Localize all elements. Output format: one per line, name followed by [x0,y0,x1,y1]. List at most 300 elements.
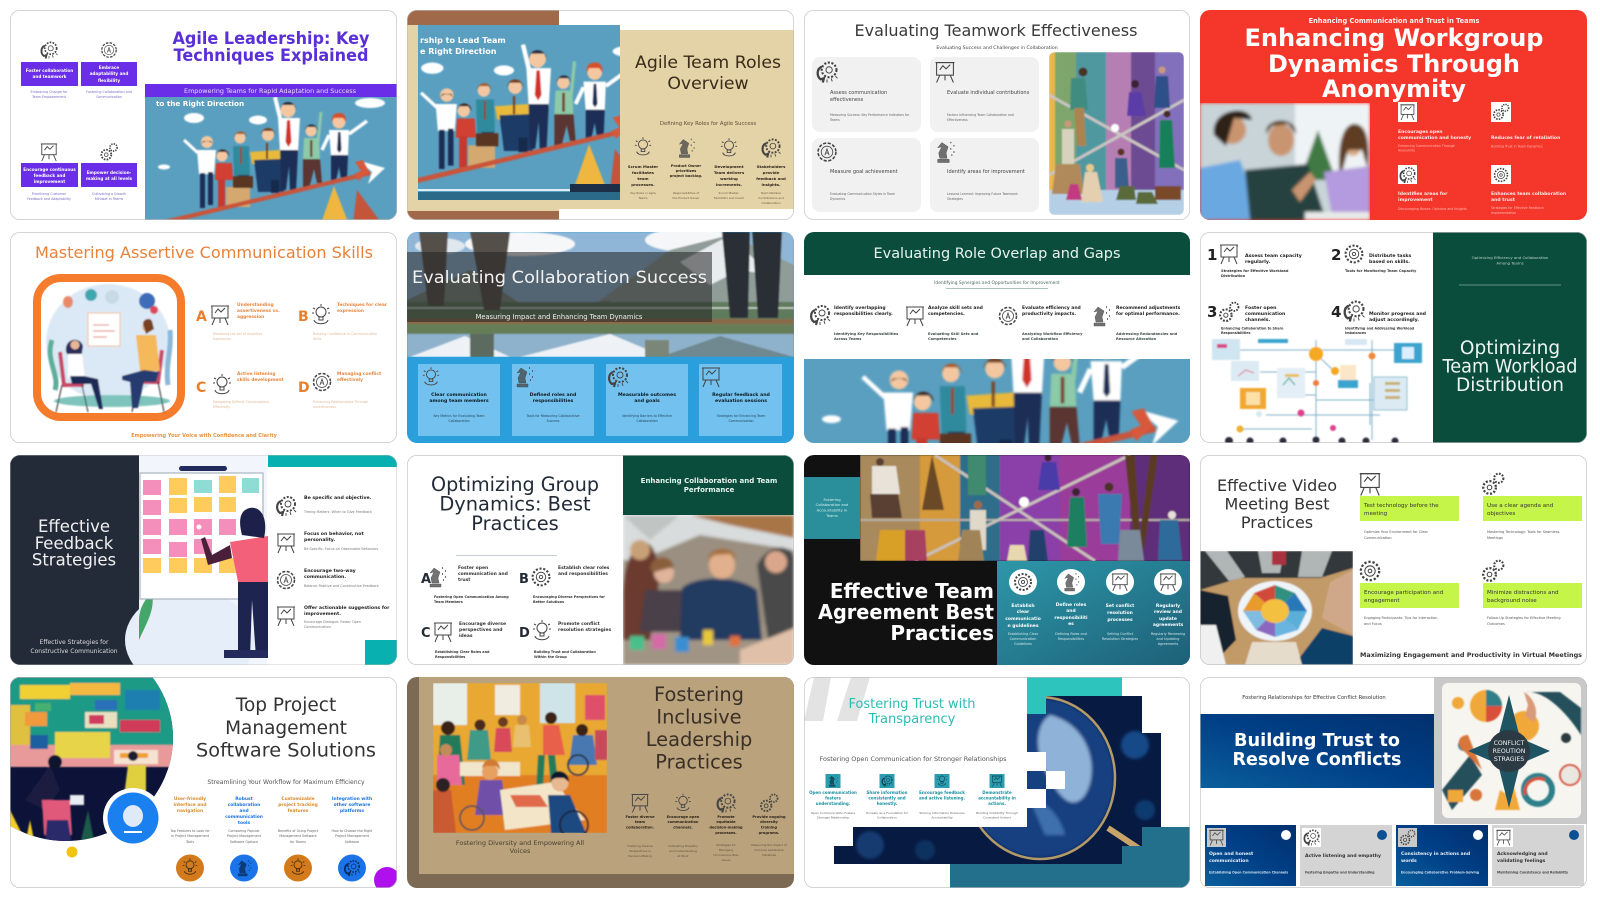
practice C: ideas [459,633,473,639]
technique: collaboration: Team Empowerment [31,95,67,99]
teal panel [997,561,1190,665]
illustration: team on arrow: e Right Direction [420,47,497,56]
item: overlapping responsibilities [811,305,898,341]
metric: clear communication: Key Metrics for Evaluating Team [433,414,485,418]
column: collaboration: Comparing Popular [228,829,260,833]
step 4: 4 [1331,303,1341,321]
title: Fostering Trust: Fostering Trust with [848,697,976,712]
tip: agenda: Use a clear agenda and [1487,503,1554,509]
role: Product Owner: prioritizes [676,169,696,173]
practice: open communication: at Work [677,854,689,858]
practice: roles: and [1066,608,1076,614]
step 1: regularly. [1245,259,1270,265]
tip: test technology [1360,474,1459,540]
column: tracking: Benefits of Using Project [278,829,319,833]
photo: builders and ropes [860,454,1190,561]
practice A: Fostering Open Communication Among [434,595,509,599]
benefit: fear of retaliation: Reduces fear of retaliation [1491,135,1560,141]
benefit: open communication: Anonymity [1398,148,1415,152]
practice D: Within the Group [534,655,567,659]
step: share information: Honesty as a Foundation for [866,811,909,815]
tip: behavior: Focus on behavior, not [304,531,364,537]
practice B: B [519,572,529,587]
item D: Managing conflict [337,371,381,377]
step 3 [1207,303,1285,335]
step: share information: Share information [867,790,908,795]
accent: teal top block [1027,677,1122,714]
step 1: Distribution [1221,274,1246,278]
tip: agenda: objectives [1487,511,1516,517]
panel: Enhancing Workgroup Dynamics slide [1200,10,1587,220]
practice: diverse collaboration [625,794,655,858]
card: individual contributions: Factors Influencing Team Collaboration and [947,113,1014,117]
step 3: channels. [1245,317,1271,323]
subtitle: Fostering Diversity and Empowering All [456,839,584,847]
tip: be specific: Timing Matters: When to Give Feedback [303,510,372,514]
role: Stakeholders: Team Member [760,191,782,195]
illustration: conflict resolution compass: REOUTION [1493,748,1526,755]
metric: clear communication: Collaboration [448,419,470,423]
sidebar with title: Strategies [32,550,116,570]
practice B: Better Solutions [533,600,564,604]
column: collaboration: and [239,808,249,814]
sidebar with title [10,455,139,665]
card: open communication: Open and honest [1209,851,1254,857]
tip: participation [1360,562,1459,626]
step 4: Imbalances [1345,331,1366,335]
step 4: Monitor progress and [1369,311,1426,317]
step: encourage feedback: Accountability [931,816,953,820]
practice C: Encourage diverse [459,621,506,627]
kicker: Enhancing Communication and Trust in Teams [1309,17,1479,25]
benefit: open communication: Encourages open [1398,129,1442,135]
item D [298,371,381,409]
practice: communication guidelines: communicatio [1005,616,1041,622]
practice: open communication: Cultivating Empathy [668,844,698,848]
card: goal achievement [812,138,921,212]
illustration: inclusive classroom [433,683,607,839]
title: Agile Team Roles: Agile Team Roles [635,53,781,73]
item B: Techniques for clear [337,302,388,308]
card: individual contributions: Evaluate individual contributions [947,90,1030,96]
metric: defined roles [512,364,594,436]
technique: feedback: improvement [34,179,65,184]
practice: open communication: channels. [673,826,693,830]
metric: defined roles: Success [547,419,560,423]
tip: agenda: Meetings [1487,536,1503,540]
subtitle band [145,84,397,97]
panel: Agile Leadership slide [10,10,397,232]
practice: equitable decisions: processes. [715,831,737,835]
step 4 [1331,302,1426,335]
practice B: Encouraging Diverse Perspectives for [533,595,605,599]
step 2: Distribute tasks [1369,253,1412,259]
item C: Effectively [213,405,230,409]
tagline: Maximizing Engagement and Productivity in Virtual Meetings [1360,652,1582,659]
benefit: areas for improvement: Discouraging Biases: Opinions and Insights [1398,207,1467,211]
item C: Active listening [237,371,276,377]
sidebar with title: Effective Strategies for [40,639,109,646]
diagram: connected workflow [1212,339,1422,445]
benefit: open communication: communication and honesty [1398,135,1471,141]
step: encourage feedback [919,774,966,820]
practice A: A [421,572,431,587]
column: collaboration: tools [238,820,251,826]
column: integration: other software [334,802,370,808]
role: Development Team: increments. [716,182,743,187]
tip: participation: Encourage participation and [1364,590,1444,596]
practice: conflict resolution: processes [1107,617,1133,623]
practice: diversity training [751,794,788,857]
metric: measurable outcomes: Measurable outcomes [618,392,676,398]
practice A: trust [458,577,471,583]
step: accountability: Demonstrate [982,790,1012,795]
accent: top bar [268,455,397,467]
header band with title: Evaluating Role Overlap and Gaps [874,246,1120,262]
column: collaboration: Software Options [230,840,258,844]
title band [1200,714,1434,788]
title overlay [407,252,712,322]
column: interface: User-friendly [174,796,206,802]
practice C: C [421,626,431,641]
item: skill sets [906,305,983,341]
role: Development Team [714,138,745,200]
title: Optimizing Group Dynamics: Dynamics: Best [439,492,591,516]
tip: agenda: Mastering Technology: Tools for Seamless [1487,530,1560,534]
metric: measurable outcomes: Identifying Barriers to Effective [622,414,672,418]
item: adjustments: for optimal performance. [1116,311,1180,317]
column: tracking: Management Software [279,834,317,838]
column: interface: navigation [177,808,203,814]
role: Scrum Master: team [637,176,649,181]
metric: defined roles: responsibilities [533,398,573,404]
metric: defined roles: Defined roles and [530,392,576,398]
illustration: team on arrow: to the Right Direction [156,99,244,108]
title: Fostering Inclusive Leadership: Inclusive [656,706,742,728]
photo: circle of people around wheel [1200,551,1353,665]
item: overlapping responsibilities: responsibilities clearly. [834,311,893,317]
subtitle: Voices [510,847,531,855]
item C: skills development [237,377,284,383]
technique: adaptability: Embrace [99,65,119,70]
practice: review agreements: Regularly Reviewing [1151,632,1185,636]
item: efficiency: and Collaboration [1022,337,1058,341]
role: Development Team: working [720,176,738,181]
tip: participation: and Focus [1364,622,1382,626]
practice: equitable decisions: decision-making [709,826,743,830]
sidebar with title: Feedback [35,534,114,553]
practice: communication guidelines: clear [1017,609,1030,615]
item D: D [298,380,310,396]
role: Scrum Master [628,137,658,200]
tip: minimize distractions: background noise [1487,598,1537,604]
metric: clear communication: Clear communication [431,392,487,398]
card: goal achievement: Measure goal achievement [830,169,898,175]
tip: participation: engagement [1364,598,1400,604]
benefit: fear of retaliation: Building Trust in Team Dynamics [1491,144,1543,148]
photo: team on ropes [1049,52,1184,215]
item C [196,371,284,409]
step 1: Strategies for Effective Workload [1221,269,1289,273]
technique: feedback: Feedback and Adaptability [27,197,71,201]
step 1 [1207,245,1302,278]
role: Stakeholders: Collaboration [761,201,781,205]
card: acknowledging feelings: Acknowledging and [1497,851,1548,857]
illustration: team close-up [804,309,1190,521]
accent: dark teal bottom block [950,827,1190,888]
step 3: Foster open [1245,305,1276,311]
card: open communication [1205,825,1296,886]
column: interface: interface and [173,802,207,808]
tip: be specific: Be specific and objective. [304,495,372,501]
panel: Effective Video Meeting slide [1200,455,1587,665]
side band [1433,232,1587,443]
step: accountability: actions. [988,801,1006,806]
tagline: Empowering Your Voice with Confidence and Clarity [131,433,278,439]
practice: diverse collaboration: Decision-Making [628,854,652,858]
card: acknowledging feelings: validating feelings [1497,858,1545,864]
practice: diverse collaboration: Fostering Diverse [627,844,653,848]
item: overlapping responsibilities: Identify overlapping [834,305,886,311]
item A [196,302,280,341]
practice: open communication: and Understanding [669,849,697,853]
step: share information: consistently and [868,796,906,800]
title: Effective Team Agreement: Practices [890,621,994,645]
practice: diverse collaboration: team [635,820,645,824]
technique: decision making: Cultivating a Growth [92,192,126,196]
practice C: perspectives and [459,627,502,633]
subtitle: Evaluating Success and Challenges in Collaboration [936,45,1058,51]
card: open communication: communication [1209,858,1249,864]
card: goal achievement: Evaluating Communication Styles in Team [830,192,895,196]
illustration: conflict resolution compass: STRAGIES [1494,756,1524,763]
practice: diversity training: programs. [759,831,779,835]
panel: Team Workload Distribution slide [1200,232,1587,445]
role: Stakeholders: Stakeholders [757,164,786,169]
practice: communication guidelines: Establishing Clear [1008,632,1039,636]
practice A: communication and [458,571,508,577]
technique: adaptability: Fostering Collaboration and [86,90,132,94]
title: Enhancing Workgroup Dynamics: Enhancing Workgroup [1244,24,1544,52]
card: acknowledging feelings [1492,825,1584,886]
icon: yellow dot [66,846,78,858]
tip: behavior [277,531,378,553]
item: skill sets: Evaluating Skill Sets and [928,332,979,336]
role: Scrum Master: Teams [637,196,648,200]
photo: people on bridge over mountain lake [407,228,794,357]
column: collaboration: Project Management [227,834,262,838]
subtitle: Fostering Open Communication for Stronger Relationships [820,756,1006,763]
title: Effective Video Meeting: Effective Video [1217,476,1337,495]
technique: collaboration: Foster collaboration [26,68,73,73]
column: integration [332,796,373,882]
card: consistency [1396,825,1488,886]
practice: diversity training: Provide ongoing [752,815,786,819]
technique: decision making: making at all levels [86,176,133,181]
item: overlapping responsibilities: Identifying Key Responsibilities [834,332,898,336]
title: Fostering Inclusive Leadership: Practices [655,750,743,774]
subtitle: Defining Key Roles for Agile Success [660,121,756,127]
item A: Understanding [237,302,274,308]
card: active listening: Active listening and empathy [1305,853,1381,859]
card: consistency: Consistency in actions and [1401,851,1470,857]
benefit: areas for improvement: Identifies areas for [1398,191,1448,197]
technique: adaptability: adaptability and [90,71,128,76]
practice: review agreements: and Updating [1157,637,1179,641]
role: Stakeholders: provide [763,170,780,175]
practice: diversity training: Measuring the Impact of [751,843,788,847]
card: active listening: Fostering Empathy and Understanding [1305,870,1375,874]
benefit: collaboration and trust: and trust [1491,197,1516,203]
accent box: Collaboration and [816,503,848,507]
practice D: Promote conflict [558,621,601,627]
technique: collaboration: Embracing Change for [31,90,68,94]
item: skill sets: Competencies [928,337,957,341]
panel: Agile Team Roles slide [392,10,794,220]
metric: regular feedback: Communication [728,419,754,423]
practice: diverse collaboration: collaboration. [626,826,654,830]
tip: actionable suggestions: Encourage Dialogue: Foster Open [304,620,361,624]
practice: diverse collaboration: Perspectives in [629,849,651,853]
technique: adaptability: flexibility [98,78,120,83]
title: Agile Leadership: Agile Leadership: Key [172,29,370,49]
title: Effective Video Meeting: Meeting Best [1224,494,1330,514]
side band: Optimizing [1460,338,1560,359]
practice: diversity training: training [761,826,777,830]
title: Top Project Management: Top Project [235,695,336,716]
practice: review agreements: Agreements [1158,642,1179,646]
metric: measurable outcomes [606,364,688,436]
column: interface [169,796,210,882]
accent box: Accountability in [817,508,848,512]
tip: two-way: Encourage two-way [304,568,356,574]
column: collaboration: Robust [235,796,253,802]
item: adjustments [1094,305,1181,341]
step 4: adjust accordingly. [1369,317,1419,323]
tip: minimize distractions: Outcomes [1487,622,1505,626]
column: integration: Integration with [332,796,372,802]
illustration: team on arrow [418,25,620,200]
title overlay: Evaluating Collaboration Success [412,268,707,288]
panel: Effective Team Agreement slide [804,454,1190,665]
benefit: collaboration and trust: Strategies for Effective Feedback [1491,206,1544,210]
practice: review agreements: Regularly [1156,603,1180,609]
metric: regular feedback: evaluation sessions [715,398,767,404]
item: efficiency [1000,305,1083,341]
tip: test technology: Test technology before the [1363,503,1439,509]
step: accountability: Consistent Actions [983,816,1011,820]
tip: test technology: meeting [1364,511,1388,517]
card: individual contributions [930,57,1039,132]
practice: review agreements: agreements [1153,622,1183,628]
step: share information: honestly. [877,801,898,806]
practice A [421,565,509,604]
practice: roles: Responsibilities [1058,637,1084,641]
role: Stakeholders: feedback and [756,176,786,181]
title: Top Project Management: Management [225,718,347,739]
role: Stakeholders: insights. [762,182,781,187]
step: accountability: accountability in [978,796,1016,800]
title: Top Project Management: Software Solutions [196,740,376,762]
practice: conflict resolution: Resolution Strategies [1102,637,1138,641]
technique: decision making: Mindset in Teams [95,197,124,201]
tip: minimize distractions [1483,561,1582,626]
panel: Building Trust to Resolve Conflicts slide [1200,677,1587,888]
card: areas for improvement: Identify areas for improvement [947,169,1025,175]
card: communication: Teams [829,118,840,122]
icon: globe button [103,788,163,848]
practice: communication guidelines: Guidelines [1014,642,1032,646]
practice: roles [1054,569,1088,641]
practice C: Responsibilities [435,655,465,659]
step 2: 2 [1331,246,1341,264]
metric: defined roles: Tools for Measuring Collaborative [526,414,580,418]
column: integration: Software [345,840,359,844]
photo: three colleagues [1200,103,1370,220]
role: Product Owner: the Product Owner [672,196,700,200]
step: open communication: Open Communication Fosters [811,811,856,815]
column: interface: Tools [185,840,194,844]
card: communication [812,57,921,132]
accent box: Fostering [823,498,841,502]
practice: equitable decisions: Unconscious Bias [713,853,739,857]
tip: participation: Engaging Participants: Tips for Interaction [1364,616,1437,620]
item B [298,302,388,341]
title: Agile Team Roles: Overview [667,74,749,94]
title: Optimizing Group Dynamics: Practices [471,512,559,535]
illustration: team on arrow [145,97,397,232]
metric: clear communication: among team members [429,398,489,404]
metric: clear communication [418,364,500,436]
step: open communication: Open communication [809,790,857,795]
technique: collaboration: and teamwork [33,74,67,79]
item: overlapping responsibilities: Across Teams [834,337,861,341]
benefit: open communication [1398,102,1471,152]
panel: Evaluating Teamwork slide [804,10,1190,220]
step 2: Tools for Monitoring Team Capacity [1345,269,1417,273]
tip: be specific [277,495,372,516]
benefit: areas for improvement: improvement [1398,197,1433,203]
title: Enhancing Workgroup Dynamics: Dynamics Through [1268,50,1520,78]
item D: Enhancing Relationships Through [313,400,368,404]
tip: behavior: Be Specific: Focus on Observable Behaviors [304,547,378,551]
practice D [519,620,611,659]
panel: Fostering Inclusive Leadership slide [407,677,794,888]
practice: equitable decisions: Strategies for [716,843,737,847]
card: communication: effectiveness [830,97,864,103]
card: areas for improvement: Lessons Learned: Improving Future Teamwork [947,192,1018,196]
practice: roles: responsibiliti [1054,615,1088,621]
benefit: collaboration and trust: Implementation [1491,211,1516,215]
practice C [421,621,506,659]
panel: Mastering Assertive Communication slide [10,232,397,443]
practice: review agreements: review and [1154,609,1182,615]
role: Development Team: Facilitator and Coach [714,196,744,200]
role: Scrum Master: facilitates [632,170,655,175]
header block: Performance [684,486,735,494]
title: Agile Leadership: Techniques Explained [174,46,368,66]
card: acknowledging feelings: Maintaining Consistency and Reliability [1497,870,1569,874]
tip: actionable suggestions: improvement. [304,611,341,617]
illustration: person at sticky-note board [125,455,268,690]
subtitle: Identifying Synergies and Opportunities for Improvement [934,280,1060,286]
practice: communication guidelines [1005,569,1041,646]
metric: measurable outcomes: and goals [634,398,660,404]
accent box [804,477,860,539]
tip: test technology: Optimize Your Environment for Clear [1364,530,1428,534]
metric: regular feedback [699,364,782,436]
side band: Team Workload [1442,356,1578,378]
